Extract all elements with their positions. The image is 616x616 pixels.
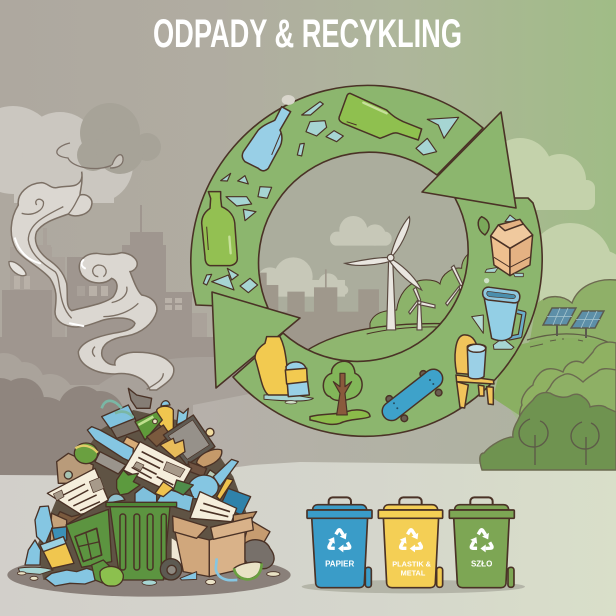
pile shadow xyxy=(7,553,291,597)
chair with cup xyxy=(455,335,494,408)
ground xyxy=(0,462,616,616)
leaf xyxy=(117,470,140,495)
low smog clouds: light xyxy=(0,353,100,435)
blue pieces in trash xyxy=(107,482,173,503)
arrow: top right xyxy=(422,112,516,208)
newspaper right xyxy=(190,492,237,522)
bottom objects xyxy=(17,558,280,586)
dark bush xyxy=(480,393,616,470)
ring: lower segment xyxy=(233,198,542,436)
bin xyxy=(106,502,177,580)
recycle icon xyxy=(399,530,423,552)
clouds: left smog xyxy=(0,106,133,203)
bush layers xyxy=(520,342,616,430)
glass shards xyxy=(203,102,459,293)
label: plastik & metal: METAL xyxy=(401,568,426,577)
tilted green bin xyxy=(66,509,112,567)
pile mass xyxy=(37,410,247,580)
green can left xyxy=(57,443,98,483)
ring: upper segment xyxy=(191,85,483,308)
road band xyxy=(193,365,560,480)
blue bottle xyxy=(242,95,295,171)
tablet xyxy=(163,415,215,465)
dark smog cloud xyxy=(57,103,161,174)
right bottle and bag xyxy=(157,459,251,515)
yellow jug and bottle xyxy=(255,337,313,404)
recycling ring xyxy=(191,85,542,436)
carton xyxy=(478,215,533,277)
right turbine xyxy=(446,265,474,320)
top bag and cans xyxy=(102,388,214,447)
smoke plume xyxy=(9,172,174,390)
left bottle and paper xyxy=(18,506,85,574)
hill behind the smoke xyxy=(90,357,330,480)
low smog clouds: dark xyxy=(0,378,190,477)
skyline: back layer xyxy=(10,228,207,340)
label: plastik & metal: PLASTIK & xyxy=(392,560,431,569)
tree and puddle xyxy=(310,361,370,424)
interior skyline xyxy=(260,270,382,349)
yellow scraps and bread xyxy=(160,438,222,477)
green bottle top xyxy=(339,93,422,140)
cardboard box xyxy=(173,512,270,577)
main turbine xyxy=(345,217,422,330)
recycle icon xyxy=(327,530,351,552)
solar panels xyxy=(543,308,604,338)
ring items xyxy=(202,93,533,424)
recycling bins xyxy=(302,497,525,593)
label: papier: PAPIER xyxy=(325,560,354,569)
newspaper centre xyxy=(123,442,192,495)
right hill and back bushes xyxy=(493,280,616,470)
big blue bottle xyxy=(87,427,143,474)
bin: glass xyxy=(449,497,514,588)
bins shadow xyxy=(302,580,525,593)
blue pitcher xyxy=(472,278,524,349)
skyline windows xyxy=(14,276,182,310)
trash bag xyxy=(245,540,274,569)
interior clouds xyxy=(257,216,392,297)
label: szkło: SZŁO xyxy=(471,560,492,569)
interior hill xyxy=(308,322,440,360)
newspaper left xyxy=(47,468,108,515)
foreground bushes xyxy=(480,342,616,470)
white bag xyxy=(172,538,186,567)
wind turbines xyxy=(345,217,474,330)
arrow: lower left xyxy=(212,292,300,388)
skateboard xyxy=(378,365,446,424)
small turbine xyxy=(409,287,435,330)
green bottle left xyxy=(202,192,237,266)
bin: plastic and metal xyxy=(378,497,443,588)
bin: paper xyxy=(307,497,372,588)
skyline: front layer xyxy=(0,205,215,417)
clouds: right xyxy=(488,138,616,310)
waste pile xyxy=(7,388,291,597)
ring interior scene xyxy=(260,155,468,361)
interior bushes xyxy=(370,254,468,328)
recycle icon xyxy=(469,530,494,552)
bush trees xyxy=(519,419,599,465)
title: ODPADY & RECYKLING xyxy=(153,12,462,56)
